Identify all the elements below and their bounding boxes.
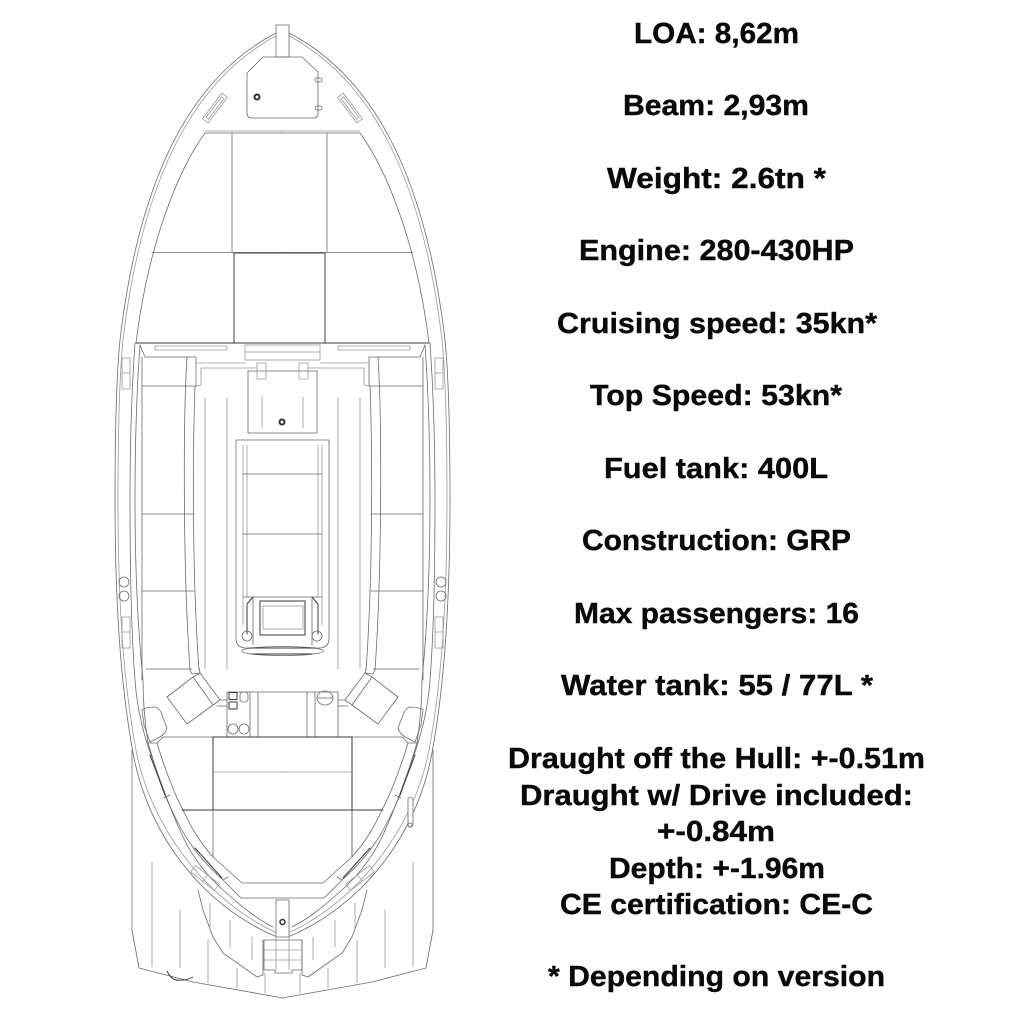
swim ladder bbox=[167, 971, 193, 980]
boat top-view plan bbox=[115, 25, 450, 998]
top speed: Top Speed: 53kn* bbox=[590, 380, 843, 412]
left half of hull and deck bbox=[115, 33, 283, 998]
companion step bbox=[245, 345, 320, 360]
helm console bbox=[236, 440, 329, 648]
foredeck edge lines bbox=[136, 131, 283, 343]
fuel tank: Fuel tank: 400L bbox=[604, 453, 828, 485]
CE certification: CE certification: CE-C bbox=[560, 889, 873, 921]
steering wheel bbox=[242, 646, 324, 656]
corner seat bbox=[142, 707, 167, 743]
right half of hull and deck bbox=[282, 33, 450, 998]
weight: Weight: 2.6tn * bbox=[607, 163, 827, 195]
gunwale ports bbox=[119, 577, 129, 601]
beam: Beam: 2,93m bbox=[623, 90, 809, 122]
draught with drive value: +-0.84m bbox=[657, 816, 775, 848]
helm screen bbox=[260, 601, 305, 635]
draught with drive: Draught w/ Drive included: bbox=[520, 780, 913, 812]
side seating bbox=[140, 345, 257, 680]
footnote: * Depending on version bbox=[548, 961, 885, 993]
max passengers: Max passengers: 16 bbox=[574, 598, 859, 630]
bow cleat bbox=[203, 93, 227, 123]
aft deck cockpit panels bbox=[213, 737, 352, 857]
gunwale cleats bbox=[122, 358, 219, 890]
draught off the hull: Draught off the Hull: +-0.51m bbox=[508, 743, 925, 775]
construction: Construction: GRP bbox=[582, 525, 851, 557]
bowsprit bbox=[276, 25, 289, 57]
bow hatch bbox=[247, 57, 322, 118]
lounge chair bbox=[167, 668, 227, 724]
LOA: LOA: 8,62m bbox=[634, 18, 799, 50]
hull outline bbox=[115, 33, 277, 937]
aft bench cushions bbox=[150, 737, 283, 880]
engine covers bbox=[198, 890, 263, 977]
gunwale lines bbox=[130, 133, 283, 927]
cockpit hatch bbox=[248, 363, 317, 433]
water tank: Water tank: 55 / 77L * bbox=[561, 670, 874, 702]
deck stripes bbox=[205, 397, 227, 669]
specifications list bbox=[508, 18, 925, 993]
central foredeck panels bbox=[232, 133, 327, 343]
swim platform bbox=[132, 750, 283, 998]
cruising speed: Cruising speed: 35kn* bbox=[557, 308, 878, 340]
depth: Depth: +-1.96m bbox=[609, 853, 825, 885]
helm seat base bbox=[317, 691, 333, 705]
transom centre step bbox=[264, 900, 302, 973]
shower handle bbox=[408, 797, 413, 827]
engine: Engine: 280-430HP bbox=[579, 235, 854, 267]
galley unit bbox=[227, 692, 338, 737]
